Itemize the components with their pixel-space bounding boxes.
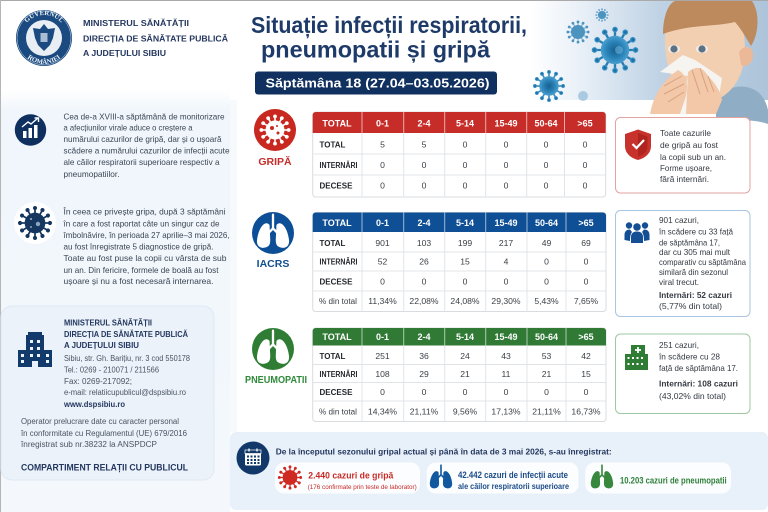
card text (658, 340, 738, 401)
row: percent of total: 21,11% (532, 406, 561, 416)
header: institution name (83, 18, 228, 58)
header: institution name: MINISTERUL SĂNĂTĂȚII (83, 18, 189, 28)
row: hospitalisations: 0 (584, 257, 589, 267)
row: percent of total: 21,11% (410, 406, 439, 416)
card text: viral trecut. (659, 277, 699, 287)
table header: >65 (578, 218, 594, 228)
row: total: 0 (504, 140, 509, 150)
contact name: DIRECȚIA DE SĂNĂTATE PUBLICĂ (64, 329, 188, 339)
row: total: 901 (375, 238, 390, 248)
row: hospitalisations: 0 (380, 160, 385, 170)
row: total: 217 (499, 238, 513, 248)
card: flu note (616, 118, 750, 193)
row: total: 5 (380, 140, 385, 150)
card text: Forme ușoare, (660, 163, 712, 173)
logo: Guvernul României seal: ROMÂNIEI (27, 54, 60, 64)
data operator note: Operator prelucrare date cu caracter personal (21, 417, 179, 426)
row: total: 36 (419, 351, 429, 361)
row: deaths: DECESE (320, 182, 353, 190)
card text: similară din sezonul (659, 267, 728, 277)
label: IACRS: IACRS (257, 258, 289, 270)
table header: >65 (577, 118, 593, 128)
row: percent of total (319, 296, 599, 306)
card text (658, 215, 746, 311)
row: deaths: 0 (463, 387, 468, 397)
card text: în scădere cu 28 (658, 352, 720, 362)
row: hospitalisations: INTERNĂRI (320, 161, 358, 170)
row: percent of total: 9,56% (453, 406, 478, 416)
text block: weekly summary: numărului cazurilor de gripă, dar și o ușoară (64, 134, 222, 144)
stat: flu cases: 2.440 cazuri de gripă (308, 470, 394, 482)
row: percent of total: 17,13% (491, 406, 521, 416)
contact address: Sibiu, str. Gh. Barițiu, nr. 3 cod 550178 (64, 354, 190, 363)
row: deaths: 0 (544, 180, 549, 190)
icon: lungs IACRS (252, 212, 294, 254)
card text (660, 128, 726, 184)
row: total: 5 (422, 140, 427, 150)
row: total: 0 (544, 140, 549, 150)
row: hospitalisations: 0 (544, 257, 549, 267)
row: hospitalisations: 29 (419, 369, 429, 379)
card text: dar cu 305 mai mult (659, 247, 731, 257)
row: hospitalisations: 4 (504, 257, 509, 267)
row: deaths: 0 (422, 276, 427, 286)
row: deaths: 0 (463, 276, 468, 286)
department name: COMPARTIMENT RELAȚII CU PUBLICUL (21, 462, 188, 472)
table header: 2-4 (417, 332, 431, 342)
label: flu: GRIPĂ (258, 155, 292, 168)
row: hospitalisations (320, 160, 588, 170)
icon: lungs pneumopathies (252, 328, 294, 370)
row: total: 251 (375, 351, 390, 361)
row: hospitalisations: INTERNĂRI (320, 370, 358, 379)
row: hospitalisations: 108 (375, 369, 390, 379)
row: total: 53 (542, 351, 551, 361)
row: deaths: 0 (422, 387, 427, 397)
row: hospitalisations: 15 (581, 369, 591, 379)
table header: TOTAL (322, 218, 352, 228)
table header: 2-4 (417, 118, 431, 128)
contact address: www.dspsibiu.ro (63, 400, 125, 409)
table header: TOTAL (322, 332, 352, 342)
text block: weekly summary: ale căilor respiratorii superioare respectiv a (64, 157, 220, 167)
stat: flu cases (275, 462, 420, 494)
row: deaths: 0 (584, 276, 589, 286)
card text: 251 cazuri, (659, 340, 699, 350)
row: percent of total: 7,65% (574, 296, 599, 306)
stat: IACRS cases (427, 462, 578, 494)
table header: >65 (578, 332, 594, 342)
row: total: TOTAL (320, 239, 346, 248)
row: percent of total: 24,08% (450, 296, 480, 306)
icon: shield (625, 130, 651, 160)
table header: 15-49 (494, 332, 518, 342)
row: hospitalisations: 11 (502, 369, 511, 379)
row: percent of total (319, 406, 601, 416)
row: hospitalisations: 0 (422, 160, 427, 170)
logo: Guvernul României seal (16, 10, 72, 66)
contact name (64, 318, 188, 350)
icon: people (624, 222, 650, 243)
header: institution name: DIRECȚIA DE SĂNĂTATE PUBLICĂ (83, 34, 228, 44)
row: deaths (320, 387, 589, 397)
table: flu (313, 112, 606, 197)
row: percent of total: 5,43% (534, 296, 559, 306)
row: hospitalisations: 0 (463, 160, 468, 170)
panel: contact details (1, 306, 214, 480)
icon: building (18, 332, 52, 367)
row: hospitalisations: 26 (419, 257, 429, 267)
contact name: A JUDEȚULUI SIBIU (64, 341, 139, 350)
icon: calendar (236, 442, 270, 474)
data operator note: înregistrat sub nr.38232 la ANSPDCP (20, 440, 157, 449)
row: deaths: 0 (584, 387, 589, 397)
row: deaths: 0 (544, 276, 549, 286)
text block: flu commentary: în care a fost raportat câte un singur caz de (63, 218, 220, 228)
panel heading: De la începutul sezonului gripal actual și până în data de 3 mai 2026, s-au înregistrat: (276, 447, 612, 457)
text block: weekly summary (64, 112, 230, 179)
row: deaths: 0 (380, 276, 385, 286)
row: deaths: 0 (504, 276, 509, 286)
row: hospitalisations: 21 (460, 369, 470, 379)
row: total: 103 (417, 238, 431, 248)
table header (313, 212, 606, 232)
photo: child (650, 1, 768, 126)
row: hospitalisations: 0 (583, 160, 588, 170)
row: deaths: DECESE (320, 388, 353, 397)
table header: TOTAL (322, 118, 352, 128)
row: total: 0 (463, 140, 468, 150)
text block: flu commentary: Toate au fost puse la copii cu vârsta de sub (64, 253, 227, 263)
text block: weekly summary: a afecțiunilor virale aduce o creștere a (64, 122, 193, 132)
text block: weekly summary: pneumopatiilor. (64, 169, 120, 179)
icon: flu virus (254, 109, 296, 151)
row: percent of total: % din total (319, 408, 357, 416)
row: total (320, 238, 591, 248)
row: total (320, 351, 591, 361)
table header: 0-1 (376, 118, 389, 128)
row: total: 42 (581, 351, 591, 361)
contact address: Tel.: 0269 - 210071 / 211566 (64, 366, 159, 374)
week badge: Săptămâna 18 (27.04–03.05.2026) (266, 76, 490, 90)
title (251, 12, 527, 64)
row: deaths (320, 180, 588, 190)
row: total: TOTAL (320, 352, 346, 361)
table header: 5-14 (456, 332, 474, 342)
card text: în scădere cu 33 față (658, 226, 733, 236)
row: percent of total: 16,73% (571, 406, 601, 416)
row: deaths: 0 (504, 387, 509, 397)
card text: de săptămâna 17, (659, 238, 720, 248)
card: pneumopathies note (616, 334, 750, 414)
hero image: child with tissue and viruses (530, 1, 768, 126)
card text: față de săptămâna 17. (659, 363, 738, 373)
row: hospitalisations: 21 (542, 369, 551, 379)
stat: pneumopathies cases: 10.203 cazuri de pneumopatii (620, 476, 727, 486)
row: total: TOTAL (320, 140, 346, 150)
card text: Internări: 52 cazuri (659, 290, 732, 300)
row: deaths: DECESE (320, 278, 353, 286)
table: IACRS (313, 212, 606, 312)
row: deaths: 0 (463, 180, 468, 190)
panel: season totals (230, 432, 768, 510)
row: total: 43 (501, 351, 511, 361)
table header: 50-64 (535, 218, 558, 228)
contact address: e-mail: relatiicupublicul@dspsibiu.ro (64, 388, 187, 397)
table header: 0-1 (376, 218, 389, 228)
row: deaths (320, 276, 589, 286)
stat: IACRS cases: 42.442 cazuri de infecții acute (458, 470, 568, 480)
row: percent of total: 22,08% (409, 296, 439, 306)
row: total: 69 (581, 238, 591, 248)
stat: pneumopathies cases (585, 462, 731, 494)
row: hospitalisations: 52 (378, 257, 387, 267)
table header: 5-14 (456, 118, 474, 128)
row: percent of total: 11,34% (368, 296, 397, 306)
row: percent of total: 29,30% (491, 296, 521, 306)
row: hospitalisations (320, 257, 589, 267)
text block: flu commentary: un an. Din fericire, formele de boală au fost (64, 265, 219, 275)
icon: rising chart (15, 114, 46, 146)
contact name: MINISTERUL SĂNĂTĂȚII (64, 318, 152, 328)
card text: (43,02% din total) (659, 391, 726, 401)
label: pneumopathies: PNEUMOPATII (245, 374, 307, 386)
row: deaths: 0 (583, 180, 588, 190)
table header (313, 112, 606, 133)
contact address: Fax: 0269-217092; (64, 377, 132, 386)
table header: 0-1 (376, 332, 389, 342)
title: Situație infecții respiratorii, (251, 12, 527, 39)
row: total: 0 (583, 140, 588, 150)
row: total: 24 (460, 351, 470, 361)
text block: flu commentary: au fost înregistrate 5 diagnostice de gripă. (64, 242, 214, 252)
row: deaths: 0 (380, 387, 385, 397)
row: hospitalisations: 15 (460, 257, 470, 267)
row: total: 49 (542, 238, 551, 248)
icon: virus (14, 202, 56, 244)
row: hospitalisations: 0 (544, 160, 549, 170)
table header: 50-64 (535, 332, 558, 342)
table header: 15-49 (494, 218, 518, 228)
icon: floating viruses (533, 8, 638, 102)
card text: comparativ cu săptămâna (659, 257, 746, 267)
table header: 5-14 (456, 218, 474, 228)
card text: 901 cazuri, (659, 215, 699, 225)
row: total (320, 140, 588, 150)
table header: 15-49 (494, 118, 518, 128)
header: institution name: A JUDEȚULUI SIBIU (83, 48, 166, 58)
row: hospitalisations: 0 (504, 160, 509, 170)
card text: fără internări. (660, 174, 709, 184)
week badge (255, 72, 497, 94)
card text: Internări: 108 cazuri (659, 379, 738, 389)
card text: la copii sub un an. (660, 152, 726, 162)
row: deaths: 0 (422, 180, 427, 190)
card text: (5,77% din total) (659, 301, 722, 311)
row: percent of total: 14,34% (368, 406, 397, 416)
text block: flu commentary: îmbolnăvire, în perioada 27 aprilie–3 mai 2026, (63, 230, 229, 240)
data operator note: în conformitate cu Regulamentul (UE) 679/2016 (20, 429, 188, 438)
card: IACRS note (616, 210, 750, 316)
table header: 50-64 (534, 118, 558, 128)
row: hospitalisations: INTERNĂRI (320, 258, 358, 267)
card text: de gripă au fost (660, 140, 719, 150)
row: deaths: 0 (380, 180, 385, 190)
logo: Guvernul României seal: GUVERNUL (24, 10, 63, 22)
table: pneumopathies (313, 328, 606, 422)
contact address (63, 354, 190, 409)
table header (313, 328, 606, 346)
card text: Toate cazurile (660, 128, 711, 138)
text block: weekly summary: scădere a numărului cazurilor de infecții acute (64, 146, 230, 156)
stat: IACRS cases: ale căilor respiratorii superioare (458, 481, 569, 491)
text block: flu commentary (63, 206, 230, 286)
row: total: 199 (458, 238, 472, 248)
row: deaths: 0 (544, 387, 549, 397)
text block: flu commentary: ușoare și nu a fost necesară internarea. (64, 276, 214, 286)
text block: weekly summary: Cea de-a XVIII-a săptămână de monitorizare (64, 112, 225, 122)
row: percent of total: % din total (319, 297, 357, 306)
table header: 2-4 (417, 218, 431, 228)
row: hospitalisations (320, 369, 591, 379)
stat: flu cases: (176 confirmate prin teste de laborator) (308, 484, 417, 491)
title: pneumopatii și gripă (261, 36, 491, 64)
row: deaths: 0 (504, 180, 509, 190)
icon: hospital (625, 345, 648, 370)
text block: flu commentary: În ceea ce privește gripa, după 3 săptămâni (63, 206, 226, 216)
data operator note (20, 417, 188, 449)
